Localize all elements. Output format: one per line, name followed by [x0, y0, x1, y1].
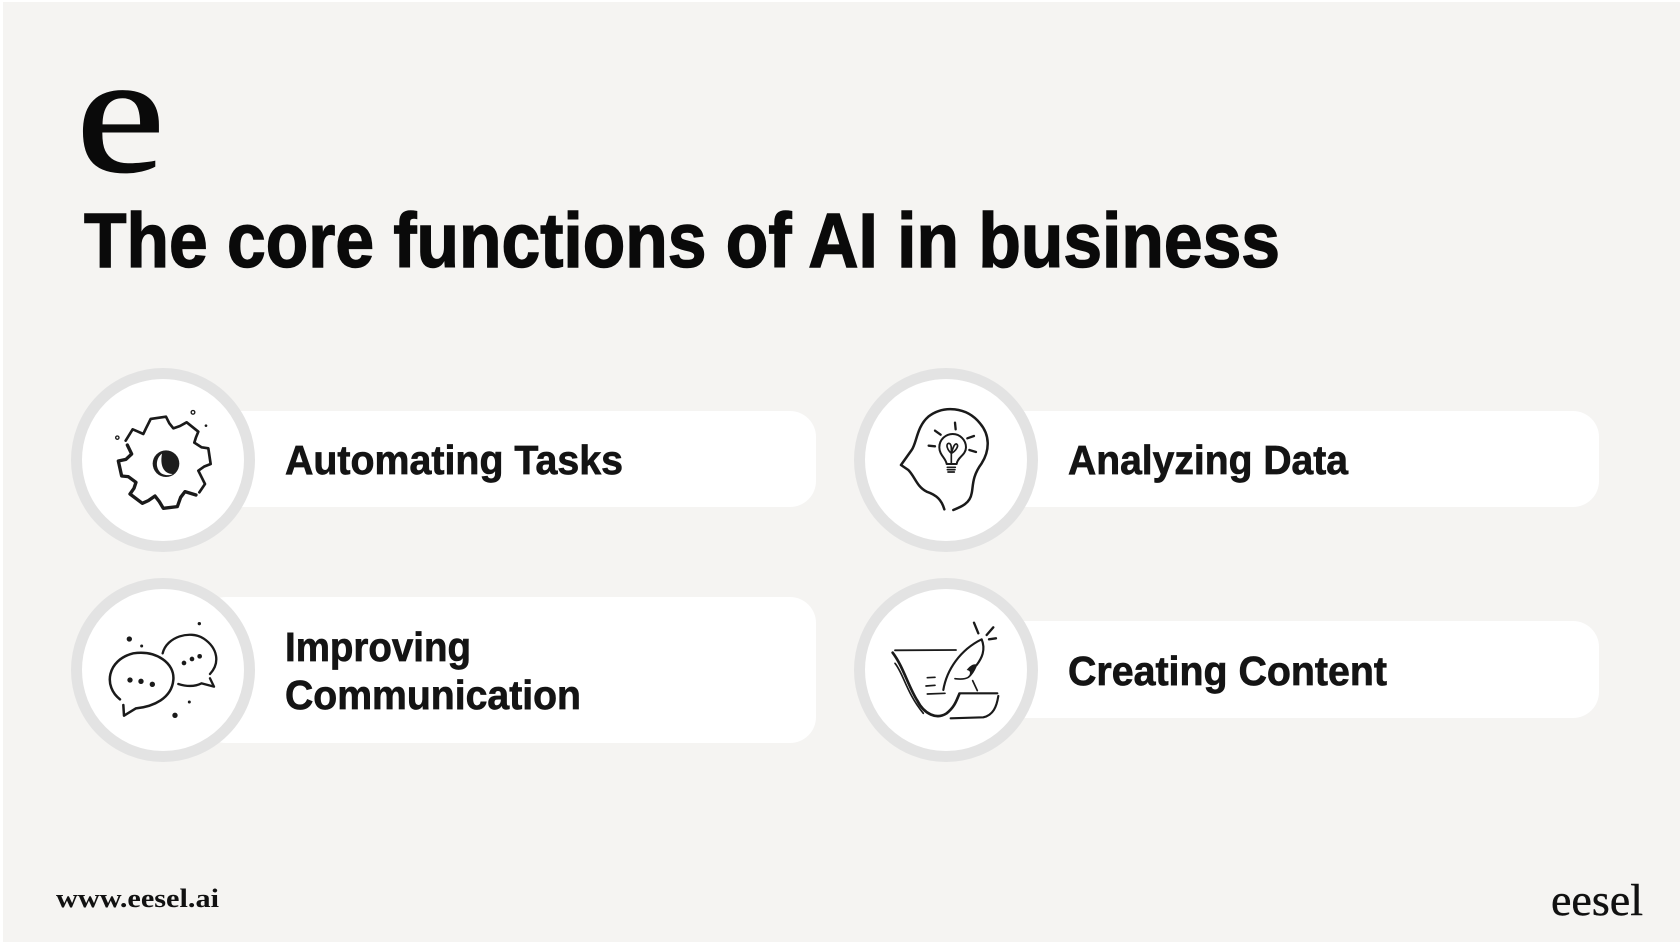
label pill — [200, 411, 816, 507]
label text: Automating Tasks — [285, 437, 623, 483]
icon: quill and inkwell — [893, 623, 998, 718]
icon: head with lightbulb — [901, 409, 988, 510]
label pill — [983, 411, 1599, 507]
label text: Creating Content — [1068, 648, 1387, 694]
card: Improving Communication — [76, 584, 816, 756]
card: Creating Content — [860, 584, 1599, 756]
label pill — [983, 621, 1599, 718]
label pill — [200, 597, 816, 743]
label text: Analyzing Data — [1068, 437, 1349, 483]
icon circle — [860, 584, 1032, 756]
icon: gear — [116, 410, 211, 508]
card: Analyzing Data — [860, 374, 1599, 546]
logo mark: e — [76, 20, 165, 208]
footer url: www.eesel.ai — [56, 884, 219, 913]
label text line 2: Communication — [285, 672, 581, 718]
footer wordmark: eesel — [1551, 876, 1643, 925]
icon circle — [860, 374, 1032, 546]
icon circle — [76, 584, 250, 756]
card: Automating Tasks — [76, 374, 816, 546]
icon circle — [76, 374, 250, 546]
label text: Improving — [285, 624, 471, 670]
icon: speech bubbles — [110, 622, 216, 718]
title: The core functions of AI in business — [84, 198, 1280, 284]
